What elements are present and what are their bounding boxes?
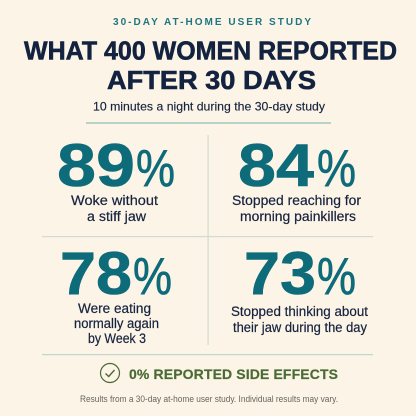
stat number: 73%: % bbox=[317, 248, 356, 306]
stat panel: 89% bbox=[57, 132, 175, 224]
stat number: 73%: 73 bbox=[244, 240, 316, 307]
stat number: 84%: % bbox=[317, 140, 356, 198]
stat label: eating normally: normally again bbox=[74, 316, 159, 331]
stat label: thinking about jaw bbox=[231, 304, 368, 335]
stat label: stiff jaw: a stiff jaw bbox=[87, 209, 146, 224]
stat label: stiff jaw bbox=[71, 193, 158, 224]
stat number: 84% bbox=[238, 132, 356, 199]
stat label: painkillers bbox=[232, 193, 362, 224]
stat number: 89%: 89 bbox=[57, 132, 135, 199]
stat label: thinking about jaw: their jaw during the day bbox=[233, 320, 367, 335]
stat label: thinking about jaw: Stopped thinking about bbox=[231, 304, 368, 319]
title: AFTER 30 DAYS bbox=[107, 65, 316, 95]
stat panel: 73% bbox=[231, 240, 368, 335]
stat number: 89% bbox=[57, 132, 175, 199]
stat label: eating normally: Were eating bbox=[78, 301, 151, 316]
stat number: 84%: 84 bbox=[238, 132, 315, 199]
stat label: painkillers: Stopped reaching for bbox=[232, 193, 362, 208]
stat number: 89%: % bbox=[136, 140, 175, 198]
side effects callout bbox=[100, 364, 338, 382]
callout text: 0% REPORTED SIDE EFFECTS bbox=[129, 366, 338, 382]
stat label: eating normally: by Week 3 bbox=[88, 331, 146, 346]
stat label: eating normally bbox=[74, 301, 159, 346]
stat number: 73% bbox=[244, 240, 356, 307]
stat panel: 78% bbox=[60, 240, 172, 346]
eyebrow: 30-DAY AT-HOME USER STUDY bbox=[113, 17, 311, 28]
footnote: Results from a 30-day at-home user study. Individual results may vary. bbox=[80, 394, 338, 404]
stat number: 78%: % bbox=[133, 248, 172, 306]
subtitle: 10 minutes a night during the 30-day study bbox=[93, 100, 325, 114]
title bbox=[24, 36, 397, 95]
icon: check circle bbox=[100, 364, 120, 382]
stat number: 78%: 78 bbox=[60, 240, 132, 307]
stat label: painkillers: morning painkillers bbox=[240, 209, 356, 224]
stat panel: 84% bbox=[232, 132, 362, 224]
stat number: 78% bbox=[60, 240, 172, 307]
stat label: stiff jaw: Woke without bbox=[71, 193, 158, 208]
title: WHAT 400 WOMEN REPORTED bbox=[24, 36, 397, 66]
